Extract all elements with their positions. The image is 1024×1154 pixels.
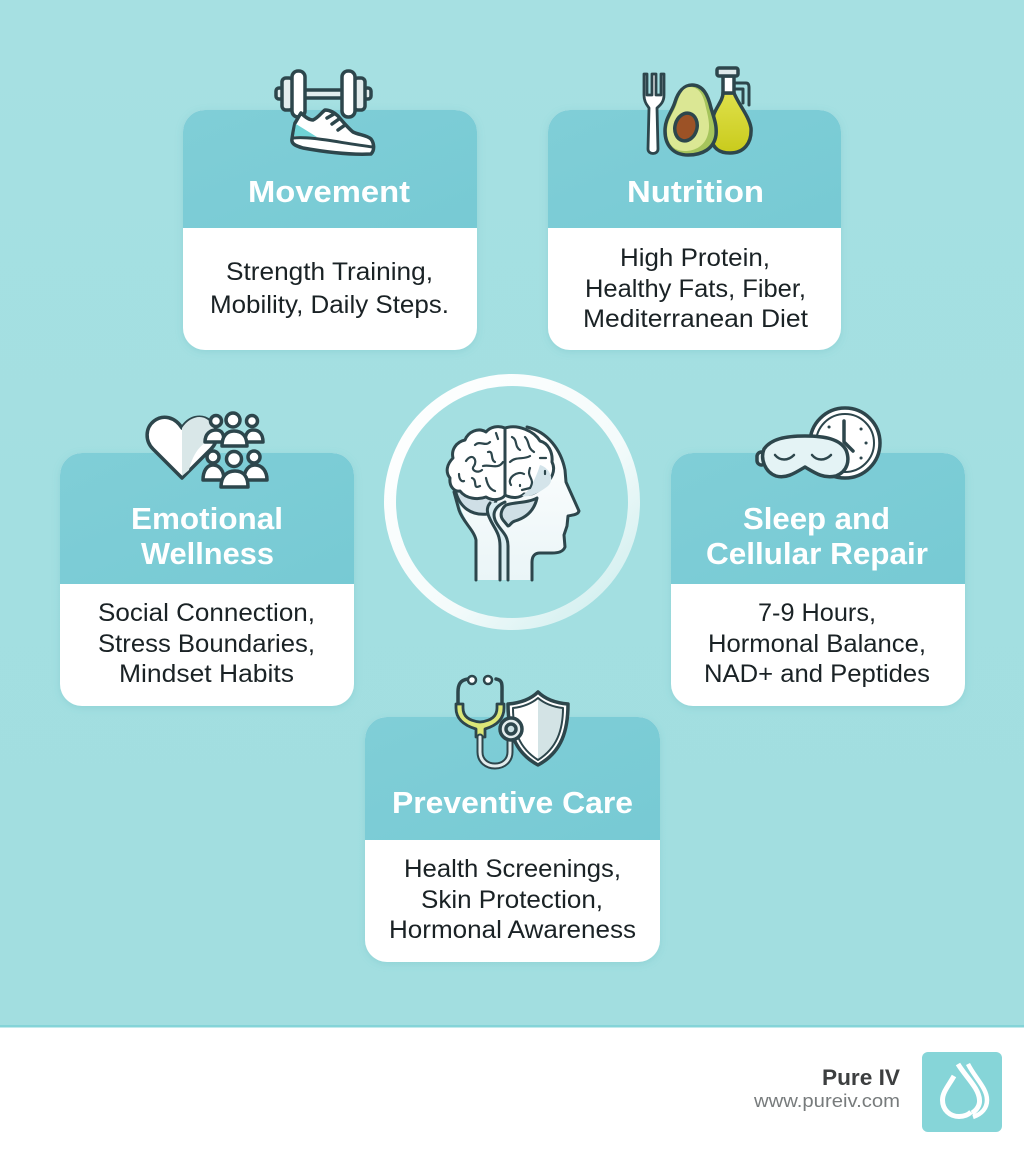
panel: sleep and cellular repair: [671, 408, 965, 706]
movement card body: [183, 110, 477, 350]
footer accent line: [0, 1025, 1024, 1028]
emotional wellness heading: [131, 501, 283, 571]
movement text: [210, 258, 449, 319]
preventive care text: [389, 855, 636, 944]
preventive care heading: Preventive Care: [392, 785, 633, 820]
emotional wellness text: Social Connection,: [98, 599, 315, 627]
panel: emotional wellness: [60, 413, 354, 706]
preventive care text: Hormonal Awareness: [389, 916, 636, 944]
sleep heading: Cellular Repair: [706, 536, 928, 571]
sleep text: [704, 599, 930, 688]
logo: [922, 1052, 1002, 1132]
preventive care text: Skin Protection,: [421, 886, 603, 914]
sleep card header: [671, 453, 965, 584]
movement card header: [183, 110, 477, 228]
emotional wellness card header: [60, 453, 354, 584]
sleep text: Hormonal Balance,: [708, 630, 926, 658]
website: www.pureiv.com: [753, 1090, 900, 1111]
nutrition card header: [548, 110, 841, 228]
preventive care card body: [365, 717, 660, 962]
nutrition text: Healthy Fats, Fiber,: [585, 275, 806, 303]
icon: fork, avocado and oil: [644, 68, 751, 155]
brand name: Pure IV: [822, 1065, 900, 1090]
emotional wellness text: Mindset Habits: [119, 660, 294, 688]
panel: preventive care: [365, 676, 660, 962]
sleep card body: [671, 453, 965, 706]
movement text: Strength Training,: [226, 258, 433, 286]
emblem ring: [390, 380, 634, 624]
central brain emblem: [390, 380, 634, 624]
footer band: [0, 1027, 1024, 1154]
icon: dumbbell and shoe: [276, 71, 374, 154]
emotional wellness text: Stress Boundaries,: [98, 630, 315, 658]
nutrition heading: Nutrition: [627, 174, 764, 209]
emotional wellness heading: Wellness: [141, 536, 274, 571]
icon: head with brain: [447, 427, 579, 580]
preventive care card header: [365, 717, 660, 840]
sleep heading: [706, 501, 928, 571]
nutrition text: High Protein,: [620, 244, 770, 272]
nutrition text: Mediterranean Diet: [583, 305, 808, 333]
nutrition card body: [548, 110, 841, 350]
movement text: Mobility, Daily Steps.: [210, 291, 449, 319]
emotional wellness heading: Emotional: [131, 501, 283, 536]
sleep text: 7-9 Hours,: [758, 599, 876, 627]
sleep heading: Sleep and: [743, 501, 890, 536]
nutrition text: [583, 244, 808, 333]
icon: stethoscope and shield: [456, 676, 568, 766]
panel: movement: [183, 71, 477, 350]
icon: heart and people: [147, 413, 267, 487]
preventive care text: Health Screenings,: [404, 855, 621, 883]
panel: nutrition: [548, 68, 841, 350]
icon: sleep mask and clock: [757, 408, 880, 478]
sleep text: NAD+ and Peptides: [704, 660, 930, 688]
footer: [0, 1025, 1024, 1154]
movement heading: Movement: [248, 174, 410, 209]
emotional wellness card body: [60, 453, 354, 706]
emotional wellness text: [98, 599, 315, 688]
